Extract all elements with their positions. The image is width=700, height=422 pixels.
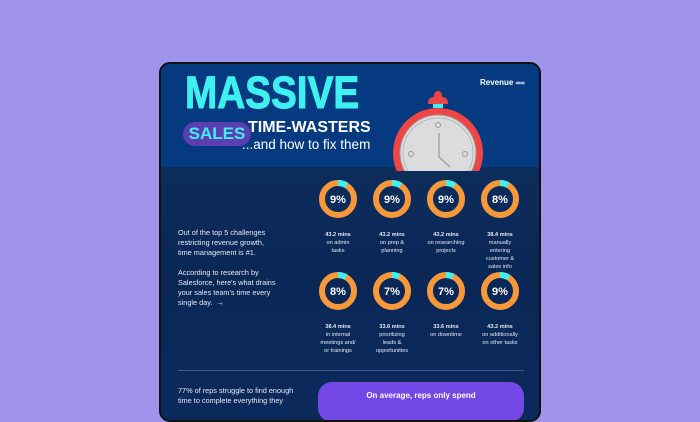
card: 38.4 mins bbox=[325, 324, 351, 330]
card: on admin bbox=[326, 240, 350, 246]
donut labels bbox=[320, 232, 518, 354]
intro text: According to research by bbox=[178, 268, 259, 277]
header bbox=[161, 64, 539, 167]
card: entering bbox=[490, 248, 510, 254]
card: opportunities bbox=[376, 348, 408, 354]
card: meetings and/ bbox=[320, 340, 356, 346]
card: 43.2 mins bbox=[379, 232, 405, 238]
donuts row 2: 9% bbox=[492, 286, 508, 298]
bottom text: 77% of reps struggle to find enough bbox=[178, 386, 293, 395]
donuts row 2: 7% bbox=[438, 286, 454, 298]
card: on prep & bbox=[380, 240, 404, 246]
bottom text: time to complete everything they bbox=[178, 396, 283, 405]
donuts row 1: 9% bbox=[384, 194, 400, 206]
card: customer & bbox=[486, 256, 514, 262]
card: or trainings bbox=[324, 348, 352, 354]
sales badge: SALES bbox=[189, 124, 245, 143]
callout: purple bbox=[318, 382, 524, 422]
donuts row 1 bbox=[322, 183, 516, 215]
card: planning bbox=[381, 248, 403, 254]
card: in internal bbox=[326, 332, 350, 338]
card: 43.2 mins bbox=[325, 232, 351, 238]
callout: purple: On average, reps only spend bbox=[366, 391, 476, 400]
card: 33.6 mins bbox=[433, 324, 459, 330]
donut chart grid bbox=[319, 180, 519, 310]
card: tasks bbox=[331, 248, 345, 254]
card: 43.2 mins bbox=[433, 232, 459, 238]
sales badge bbox=[183, 122, 251, 146]
card: on other tasks bbox=[482, 340, 518, 346]
card: 38.4 mins bbox=[487, 232, 513, 238]
intro text: Salesforce, here's what drains bbox=[178, 278, 276, 287]
card: projects bbox=[436, 248, 456, 254]
card: on additionally bbox=[482, 332, 518, 338]
card: 43.2 mins bbox=[487, 324, 513, 330]
intro text: restricting revenue growth, bbox=[178, 238, 264, 247]
donuts row 1: 9% bbox=[330, 194, 346, 206]
card: manually bbox=[489, 240, 511, 246]
card: leads & bbox=[383, 340, 401, 346]
intro text bbox=[178, 228, 276, 307]
donuts row 2: 8% bbox=[330, 286, 346, 298]
donuts row 1: 9% bbox=[438, 194, 454, 206]
intro text: single day. → bbox=[178, 298, 224, 307]
intro text: Out of the top 5 challenges bbox=[178, 228, 265, 237]
card bbox=[159, 62, 541, 422]
icon: stopwatch bbox=[393, 91, 483, 171]
card: on researching bbox=[427, 240, 464, 246]
intro text: your sales team's time every bbox=[178, 288, 270, 297]
bottom text bbox=[178, 386, 293, 405]
subtitle: TIME-WASTERS bbox=[248, 119, 371, 136]
card: 33.6 mins bbox=[379, 324, 405, 330]
donuts row 2 bbox=[322, 275, 516, 307]
card: sales info bbox=[488, 264, 512, 270]
card: prioritizing bbox=[379, 332, 405, 338]
title: MASSIVE: MASSIVE bbox=[185, 67, 359, 118]
logo: Revenue ⩵ bbox=[480, 78, 525, 87]
intro text: time management is #1. bbox=[178, 248, 256, 257]
card: on downtime bbox=[430, 332, 462, 338]
donuts row 1: 8% bbox=[492, 194, 508, 206]
donuts row 2: 7% bbox=[384, 286, 400, 298]
tagline: ...and how to fix them bbox=[242, 137, 370, 152]
